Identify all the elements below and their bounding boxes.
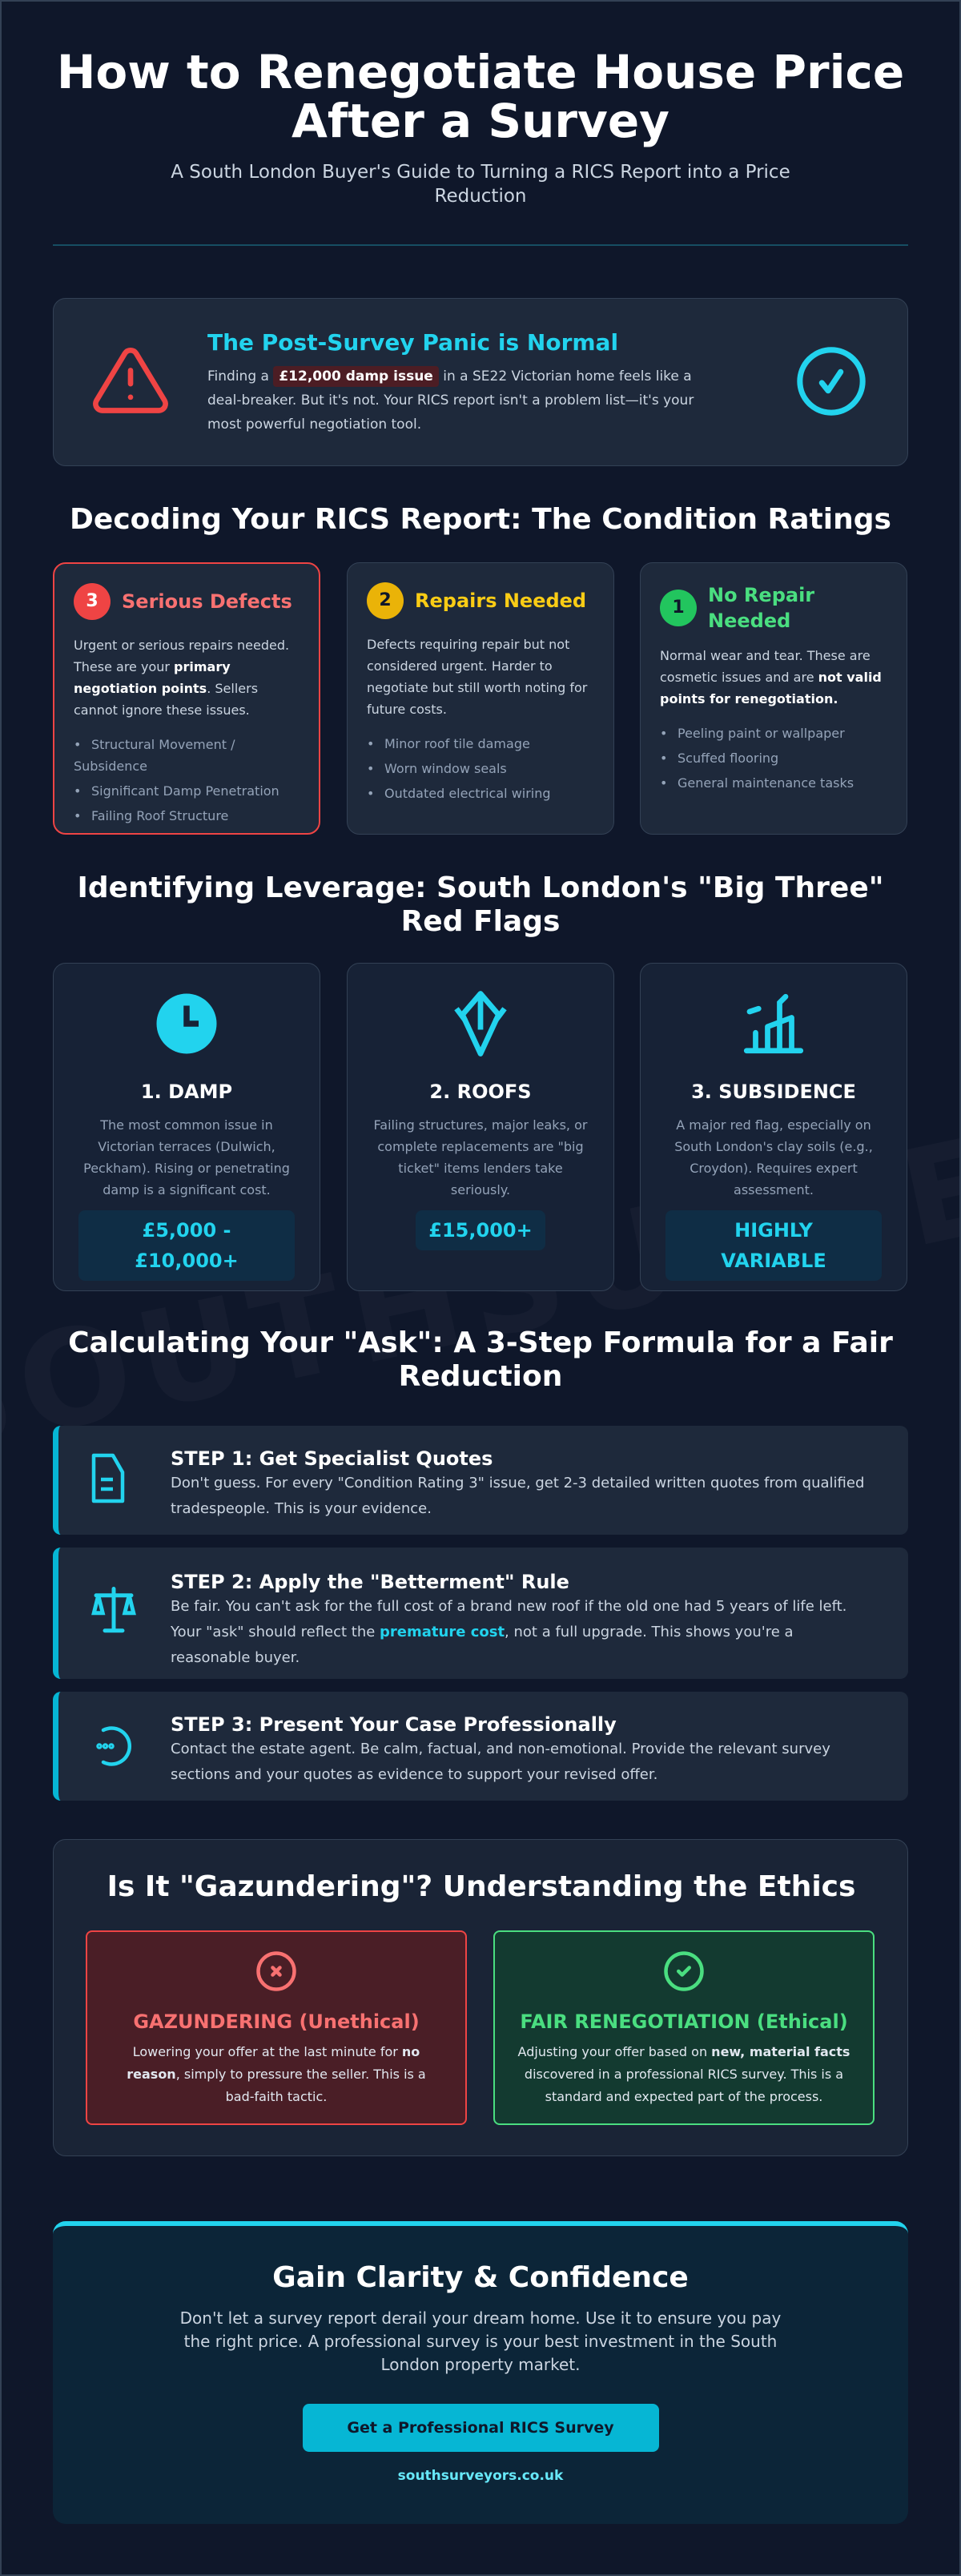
panel: rating 2: Outdated electrical wiring [384,786,551,801]
panel: step 2 [53,1548,908,1679]
panel: step 2: Be fair. You can't ask for the full cost of a brand new roof if the old one had 5 years of life left. Your "ask" should reflect the premature cost, not a full upgrade. This shows you're a reasonable buyer. [171,1598,846,1666]
panel: post-survey panic [53,298,908,466]
icon: check circle green [664,1951,704,1991]
text: panic body: Finding a £12,000 damp issue in a SE22 Victorian home feels like a deal-breaker. But it's not. Your RICS report isn't a problem list—it's your most powerful negotiation tool. [207,368,694,433]
panel: rating 3: Urgent or serious repairs needed. These are your primary negotiation points. Sellers cannot ignore these issues. [74,638,289,718]
panel: step 1: STEP 1: Get Specialist Quotes [171,1447,493,1470]
panel: rating 1: Peeling paint or wallpaper [678,726,845,741]
panel: rating 2: Worn window seals [384,761,507,776]
panel: rating 3: 3 [86,591,99,611]
panel: step 3: STEP 3: Present Your Case Professionally [171,1713,617,1736]
box: fair renegotiation [493,1930,875,2125]
subtitle: A South London Buyer's Guide to Turning a RICS Report into a Price Reduction [171,162,790,207]
title: How to Renegotiate House Price [57,45,904,99]
panel: rating 3: Failing Roof Structure [91,808,228,823]
box: fair renegotiation: Adjusting your offer based on new, material facts discovered in a professional RICS survey. This is a standard and expected part of the process. [518,2044,850,2104]
panel: step 1: Don't guess. For every "Condition Rating 3" issue, get 2-3 detailed written quotes from qualified tradespeople. This is your evidence. [171,1475,864,1517]
panel: rating 1: Scuffed flooring [678,751,778,766]
icon: x circle [256,1951,296,1991]
heading: panic: The Post-Survey Panic is Normal [207,329,618,356]
heading: big three: Identifying Leverage: South London's "Big Three" Red Flags [77,871,884,938]
panel: roofs: Failing structures, major leaks, or complete replacements are "big ticket" items lenders take seriously. [374,1117,587,1197]
panel: rating 1: Needed [708,610,790,632]
panel: subsidence: 3. SUBSIDENCE [691,1081,856,1103]
icon: chat dots [96,1726,131,1766]
button: Get a Professional RICS Survey [347,2419,614,2437]
panel: rating 2: Repairs Needed [415,590,586,612]
title [57,45,904,148]
panel: subsidence: A major red flag, especially on South London's clay soils (e.g., Croydon). Requires expert assessment. [674,1117,873,1197]
icon: subsidence [743,993,804,1054]
panel: damp [53,963,320,1291]
icon: check circle [797,347,866,416]
panel: roofs: 2. ROOFS [429,1081,532,1103]
panel: rating 1: No Repair [708,584,814,606]
panel: subsidence [640,963,907,1291]
panel: step 2: STEP 2: Apply the "Betterment" Rule [171,1571,569,1593]
panel: rating 2: Minor roof tile damage [384,736,530,751]
panel: subsidence: HIGHLY [734,1219,813,1242]
panel: rating 3: Significant Damp Penetration [91,783,279,799]
panel: step 1 [53,1426,908,1535]
panel: damp: £10,000+ [135,1250,239,1272]
box: gazundering: Lowering your offer at the last minute for no reason, simply to pressure the seller. This is a bad-faith tactic. [127,2044,426,2104]
icon: roof [454,991,507,1057]
panel: step 3: Contact the estate agent. Be calm, factual, and non-emotional. Provide the relevant survey sections and your quotes as evidence to support your revised offer. [171,1741,830,1783]
panel: ethics [53,1839,908,2156]
panel: step 3 [53,1692,908,1801]
box: fair renegotiation: FAIR RENEGOTIATION (Ethical) [520,2010,848,2033]
panel: rating 1: 1 [672,598,685,618]
panel: rating 1 [640,562,907,835]
panel: damp: £5,000 - [143,1219,231,1242]
panel: rating 3: Serious Defects [122,590,292,613]
title: After a Survey [292,94,669,148]
heading: formula: Calculating Your "Ask": A 3-Step Formula for a Fair Reduction [68,1326,893,1393]
icon: scales [91,1587,136,1632]
box: gazundering: GAZUNDERING (Unethical) [133,2010,420,2033]
panel: roofs: £15,000+ [428,1219,533,1242]
panel: rating 2: Defects requiring repair but not considered urgent. Harder to negotiate but still worth noting for future costs. [367,637,587,717]
text: cta body: Don't let a survey report derail your dream home. Use it to ensure you pay the right price. A professional survey is your best investment in the South London property market. [180,2308,781,2374]
panel: damp: The most common issue in Victorian terraces (Dulwich, Peckham). Rising or penetrating damp is a significant cost. [83,1117,290,1197]
panel: rating 2: 2 [379,590,392,610]
heading: condition ratings: Decoding Your RICS Report: The Condition Ratings [70,503,891,536]
panel: subsidence: VARIABLE [721,1250,826,1272]
url: southsurveyors.co.uk [398,2468,563,2484]
panel: rating 3 [53,562,320,835]
panel: rating 2 [347,562,614,835]
heading: ethics: Is It "Gazundering"? Understanding the Ethics [107,1870,855,1903]
box: gazundering [86,1930,467,2125]
panel: rating 3: Structural Movement / Subsidence [74,737,235,774]
heading: cta: Gain Clarity & Confidence [272,2261,689,2294]
icon: clock [157,993,216,1054]
panel: roofs [347,963,614,1291]
panel: rating 1: Normal wear and tear. These are cosmetic issues and are not valid points for renegotiation. [660,648,882,706]
icon: document [91,1453,125,1503]
button [303,2404,658,2452]
icon: warning [93,348,168,413]
panel: rating 1: General maintenance tasks [678,775,854,791]
panel: CTA [53,2221,908,2524]
panel: damp: 1. DAMP [141,1081,232,1103]
